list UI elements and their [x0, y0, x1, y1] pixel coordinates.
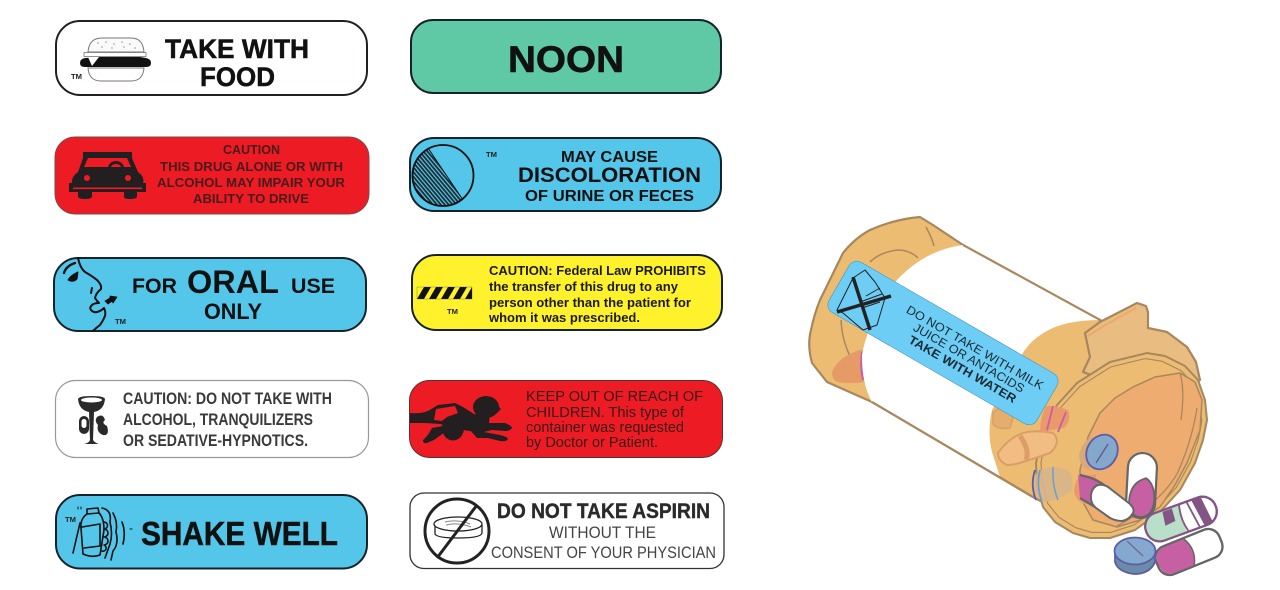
- label text: OF URINE OR FECES: [525, 188, 694, 205]
- label: do not take with alcohol: [56, 380, 368, 458]
- label text: NOON: [508, 39, 624, 80]
- label: keep out of reach of children: [410, 380, 722, 458]
- label: take with food: [56, 21, 367, 95]
- pale pill seen through back: [832, 350, 866, 383]
- label text: KEEP OUT OF REACH OF: [526, 389, 703, 405]
- label text: [157, 142, 346, 206]
- label text: CAUTION: Federal Law PROHIBITS: [489, 263, 706, 278]
- label text: MAY CAUSE: [561, 149, 658, 166]
- cap edge stripe: [1088, 308, 1136, 336]
- bottle body: [809, 217, 1137, 538]
- trademark: TM: [65, 515, 76, 524]
- label text: WITHOUT THE: [549, 524, 656, 542]
- icon: face profile: [64, 258, 117, 331]
- label: do not take aspirin: [410, 493, 724, 568]
- blue warning label on bottle: [825, 258, 1061, 428]
- icon: half hatched circle: [412, 145, 474, 206]
- label text: [518, 149, 701, 205]
- icon: no milk or juice: [837, 270, 891, 330]
- label text: ONLY: [204, 299, 262, 324]
- label text: SHAKE WELL: [141, 515, 338, 552]
- spilled capsule magenta and white: [1152, 525, 1226, 579]
- bottle interior: [1080, 373, 1202, 527]
- blue tablet in cap: [1080, 429, 1124, 475]
- trademark: TM: [447, 307, 458, 316]
- icon: hamburger: [80, 38, 151, 81]
- icon: wine glass and pills: [78, 396, 108, 444]
- pills seen through body: [993, 406, 1073, 502]
- label text: CAUTION: [223, 142, 280, 157]
- label text: [891, 303, 1046, 414]
- label text: TAKE WITH WATER: [906, 333, 1019, 406]
- label: noon: [411, 20, 721, 93]
- illustration: tipped pill bottle: [809, 217, 1226, 579]
- label text: container was requested: [526, 420, 684, 436]
- label: may cause discoloration: [410, 138, 721, 211]
- trademark: TM: [71, 72, 82, 81]
- label text: [165, 34, 309, 92]
- label text: TAKE WITH: [165, 34, 309, 64]
- label text: OR SEDATIVE-HYPNOTICS.: [123, 432, 308, 450]
- label text: USE: [291, 275, 335, 298]
- label text: CHILDREN. This type of: [526, 405, 685, 421]
- trademark: TM: [486, 150, 497, 159]
- label text: whom it was prescribed.: [488, 310, 640, 325]
- icon: no aspirin: [425, 499, 489, 563]
- label text: DO NOT TAKE ASPIRIN: [497, 500, 710, 523]
- label text: ORAL: [187, 264, 279, 300]
- label text: [488, 263, 706, 325]
- label: for oral use only: [54, 258, 366, 331]
- icon: crawling child: [410, 396, 512, 443]
- label text: the transfer of this drug to any: [489, 279, 679, 294]
- label text: FOR: [132, 275, 177, 298]
- interior edge lines: [1117, 373, 1197, 526]
- label text: ALCOHOL MAY IMPAIR YOUR: [157, 175, 346, 190]
- cap inner ring line: [1041, 359, 1202, 532]
- capsule angled magenta and white: [1078, 475, 1134, 521]
- label: federal law prohibits transfer: [412, 255, 722, 330]
- icon: hazard stripe: [417, 287, 479, 299]
- white wrap label: [862, 245, 1100, 477]
- capsule upright white and magenta: [1125, 452, 1158, 519]
- icon: hand shaking bottle: [73, 507, 132, 560]
- icon: car: [69, 152, 146, 199]
- label text: CONSENT OF YOUR PHYSICIAN: [491, 544, 716, 562]
- label text: [132, 264, 335, 324]
- cap ring: [1036, 353, 1207, 538]
- label text: ALCOHOL, TRANQUILIZERS: [123, 411, 313, 429]
- label text: by Doctor or Patient.: [526, 435, 658, 451]
- shadow tints in cap: [1074, 436, 1096, 504]
- trademark: TM: [115, 317, 126, 326]
- label text: [526, 389, 703, 451]
- label text: DISCOLORATION: [518, 163, 701, 187]
- spilled blue tablet: [1114, 538, 1156, 574]
- label text: ABILITY TO DRIVE: [193, 191, 309, 206]
- label: impaired driving caution: [55, 137, 369, 214]
- label text: CAUTION: DO NOT TAKE WITH: [123, 390, 332, 408]
- label text: DO NOT TAKE WITH MILK: [904, 303, 1046, 393]
- label text: [491, 500, 716, 562]
- label text: [123, 390, 332, 450]
- label text: person other than the patient for: [489, 295, 691, 310]
- spilled capsule green and purple: [1141, 493, 1221, 545]
- cap flange: [1083, 303, 1200, 400]
- label text: FOOD: [200, 62, 275, 92]
- back ring details: [841, 227, 934, 356]
- label text: JUICE OR ANTACIDS: [911, 320, 1027, 396]
- label: shake well: [56, 495, 367, 568]
- label text: THIS DRUG ALONE OR WITH: [160, 159, 343, 174]
